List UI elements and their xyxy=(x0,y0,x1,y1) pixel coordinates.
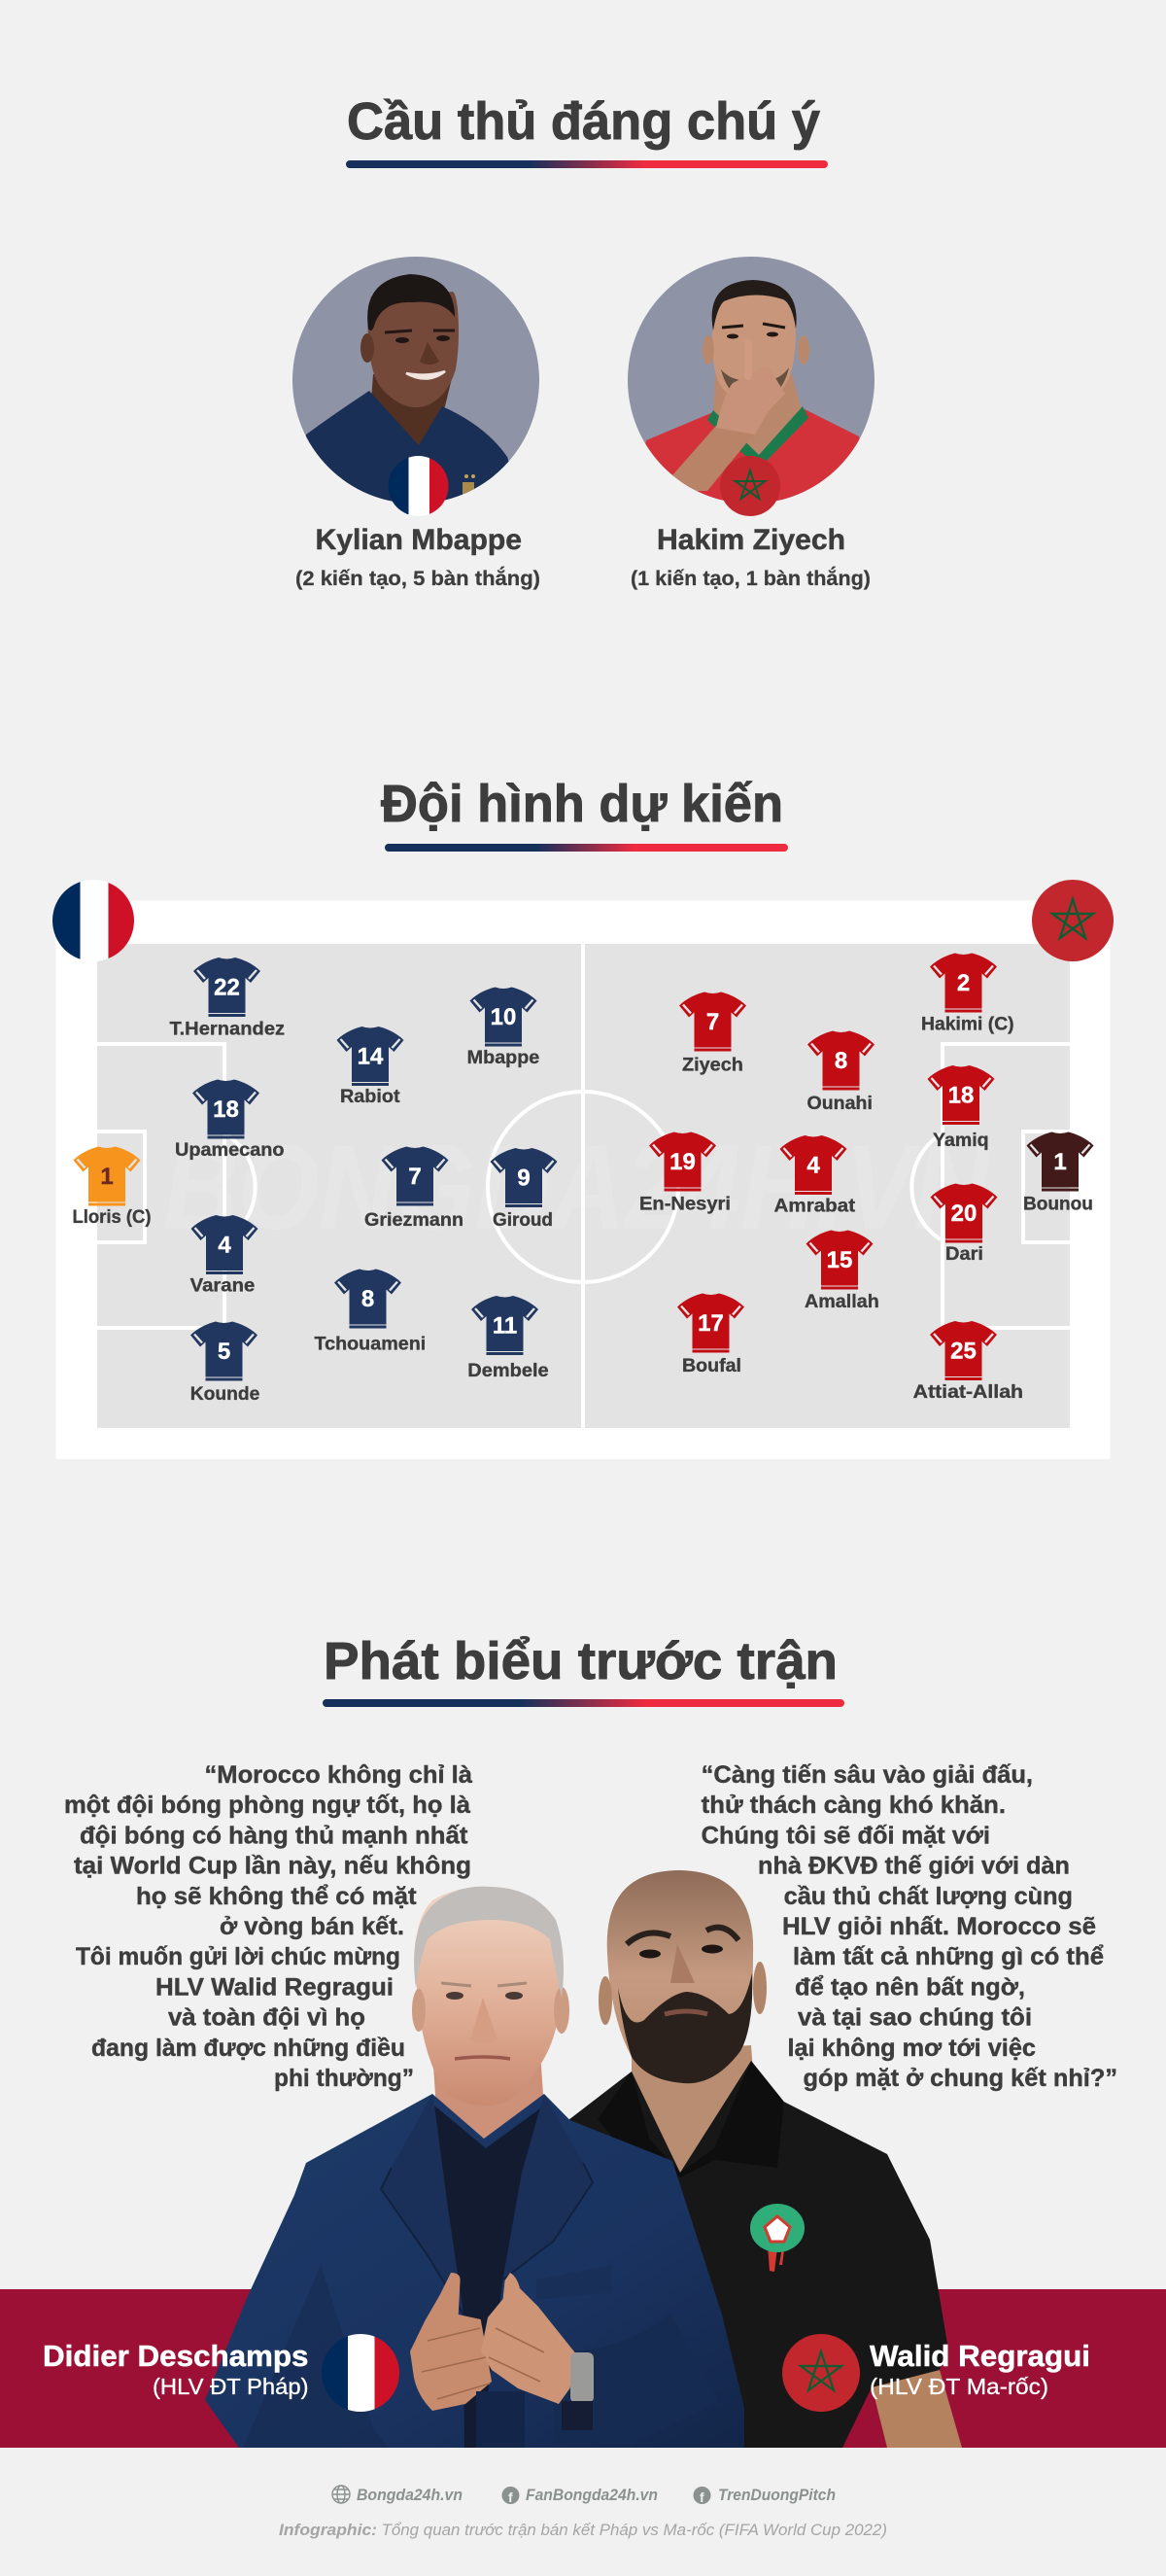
icon: globe xyxy=(332,2486,350,2503)
player: Boufal: 17 xyxy=(698,1310,724,1337)
panel: Hakim Ziyech xyxy=(627,257,875,590)
quote: Walid Regragui: góp mặt ở chung kết nhỉ?” xyxy=(803,2065,1117,2092)
stats: Ziyech: (1 kiến tạo, 1 bàn thắng) xyxy=(631,567,871,590)
player: Hakimi (C): 2 xyxy=(957,970,970,996)
quote: Walid Regragui: thử thách càng khó khăn. xyxy=(702,1792,1006,1819)
player: Tchouameni: Tchouameni xyxy=(315,1334,426,1355)
photo: Didier Deschamps xyxy=(205,1887,744,2448)
photo: Walid Regragui xyxy=(568,1870,962,2448)
player: Amrabat: Amrabat xyxy=(773,1196,856,1217)
player: Dembele: 11 xyxy=(493,1312,517,1340)
player: Upamecano: Upamecano xyxy=(175,1139,285,1161)
player: Ziyech xyxy=(679,992,746,1075)
player: Lloris (C): 1 xyxy=(100,1164,114,1190)
player: Amrabat: 4 xyxy=(806,1153,820,1178)
player: En-Nesyri: En-Nesyri xyxy=(639,1194,731,1215)
player: Ounahi xyxy=(806,1030,874,1114)
player: Bounou xyxy=(1023,1131,1094,1215)
footer: sources: FanBongda24h.vn xyxy=(526,2486,658,2504)
icon: France flag xyxy=(389,456,449,516)
quote: Walid Regragui: HLV giỏi nhất. Morocco sẽ xyxy=(782,1913,1096,1940)
player: Lloris (C): Lloris (C) xyxy=(72,1206,152,1228)
label: Walid Regragui: (HLV ĐT Ma-rốc) xyxy=(870,2374,1048,2399)
player: Griezmann: 7 xyxy=(408,1164,422,1190)
player: Dembele xyxy=(467,1296,549,1381)
quote: Didier Deschamps: đội bóng có hàng thủ mạnh nhất xyxy=(80,1822,468,1849)
player: Attiat-Allah xyxy=(913,1321,1023,1403)
label: Walid Regragui xyxy=(870,2339,1090,2399)
player: Lloris (C) xyxy=(72,1147,152,1228)
player: Boufal: Boufal xyxy=(682,1355,741,1376)
icon: facebook xyxy=(501,2487,519,2505)
photo: Mbappe portrait xyxy=(292,257,540,525)
icon: facebook: f xyxy=(700,2489,704,2505)
quote: Didier Deschamps: họ sẽ không thể có mặt xyxy=(136,1883,417,1910)
icon: Morocco flag xyxy=(782,2334,860,2412)
player: Upamecano xyxy=(175,1079,285,1161)
player: Mbappe: 10 xyxy=(491,1004,516,1030)
pitch surface xyxy=(97,944,1070,1428)
icon: facebook: f xyxy=(508,2489,513,2505)
watch xyxy=(570,2352,594,2403)
player: Tchouameni xyxy=(315,1270,426,1355)
player: T.Hernandez: 22 xyxy=(214,974,240,1001)
footer: sources: TrenDuongPitch xyxy=(718,2486,836,2504)
quote: Didier Deschamps: “Morocco không chỉ là xyxy=(204,1761,472,1789)
banner: coaches xyxy=(0,2289,1166,2448)
player: Amallah: Amallah xyxy=(805,1291,879,1312)
player: En-Nesyri xyxy=(639,1131,731,1215)
pitch frame xyxy=(56,900,1110,1459)
heading: Phát biểu trước trận: Phát biểu trước trận xyxy=(324,1632,838,1690)
player: Rabiot xyxy=(336,1027,404,1107)
quote: Walid Regragui xyxy=(702,1761,1117,2092)
icon: Morocco flag xyxy=(1032,880,1114,961)
player: Kounde: 5 xyxy=(218,1339,230,1365)
quote: Didier Deschamps: và toàn đội vì họ xyxy=(168,2004,365,2032)
heading: Cầu thủ đáng chú ý: Cầu thủ đáng chú ý xyxy=(347,92,820,151)
quote: Didier Deschamps: ở vòng bán kết. xyxy=(220,1913,404,1940)
panel: pitch with line-ups xyxy=(52,880,1114,1459)
player: Ounahi: 8 xyxy=(835,1048,847,1074)
player: Dari xyxy=(931,1184,997,1265)
player: Varane: Varane xyxy=(190,1275,255,1297)
player: Hakimi (C) xyxy=(921,953,1014,1034)
player: Amallah xyxy=(805,1231,879,1312)
player: Yamiq: 18 xyxy=(948,1083,974,1108)
player: Ziyech: 7 xyxy=(706,1009,719,1035)
quote: Walid Regragui: “Càng tiến sâu vào giải đấu, xyxy=(702,1761,1033,1789)
quote: Didier Deschamps: Tôi muốn gửi lời chúc mừng xyxy=(76,1943,400,1970)
name: Kylian Mbappe: Kylian Mbappe xyxy=(315,524,522,556)
player: Rabiot: Rabiot xyxy=(340,1086,400,1107)
hands xyxy=(410,2273,492,2411)
icon: Morocco badge xyxy=(750,2204,805,2272)
player: T.Hernandez: T.Hernandez xyxy=(169,1019,285,1040)
quote: Walid Regragui: cầu thủ chất lượng cùng xyxy=(784,1883,1073,1910)
player: Bounou: 1 xyxy=(1053,1149,1067,1175)
player: Kounde: Kounde xyxy=(190,1383,259,1405)
label: Didier Deschamps: Didier Deschamps xyxy=(43,2339,309,2373)
player: Amallah: 15 xyxy=(827,1247,852,1273)
player: Dari: 20 xyxy=(951,1201,977,1227)
footer: sources: Bongda24h.vn xyxy=(357,2486,463,2504)
footer: infographic credit: Tổng quan trước trận bán kết Pháp vs Ma-rốc (FIFA World Cup 2022) xyxy=(381,2521,887,2539)
quote: Walid Regragui: lại không mơ tới việc xyxy=(787,2035,1036,2062)
icon: France flag xyxy=(52,880,134,961)
heading: Đội hình dự kiến: Đội hình dự kiến xyxy=(381,775,783,833)
player: Rabiot: 14 xyxy=(358,1044,384,1069)
icon: facebook xyxy=(694,2487,711,2505)
watermark: BONGDA24H.VN xyxy=(163,1122,991,1255)
icon: France flag xyxy=(322,2334,399,2412)
label: Didier Deschamps xyxy=(43,2339,309,2399)
player: Boufal xyxy=(677,1293,744,1376)
player: Attiat-Allah: 25 xyxy=(950,1338,977,1365)
icon: Morocco flag xyxy=(720,456,780,516)
quote: Walid Regragui: để tạo nên bất ngờ, xyxy=(795,1973,1025,2001)
player: Kounde xyxy=(190,1322,259,1405)
player: Upamecano: 18 xyxy=(213,1097,239,1123)
player: Dari: Dari xyxy=(945,1243,983,1265)
player: T.Hernandez xyxy=(169,957,285,1040)
quote: Didier Deschamps: một đội bóng phòng ngự tốt, họ là xyxy=(64,1792,470,1819)
quote: Didier Deschamps: HLV Walid Regragui xyxy=(155,1973,394,2001)
footer: sources xyxy=(332,2486,836,2505)
player: Yamiq xyxy=(927,1065,995,1151)
player: Griezmann: Griezmann xyxy=(364,1209,463,1231)
player: Yamiq: Yamiq xyxy=(933,1130,989,1151)
quote: Walid Regragui: làm tất cả những gì có thể xyxy=(793,1943,1104,1970)
pitch markings xyxy=(97,944,1070,1428)
quote: Didier Deschamps: phi thường” xyxy=(274,2065,414,2092)
player: Ziyech: Ziyech xyxy=(682,1054,743,1075)
label: Didier Deschamps: (HLV ĐT Pháp) xyxy=(153,2374,309,2399)
quote: Walid Regragui: nhà ĐKVĐ thế giới với dàn xyxy=(758,1853,1070,1880)
label: Walid Regragui: Walid Regragui xyxy=(870,2339,1090,2373)
player: Dembele: Dembele xyxy=(467,1360,549,1381)
player: Attiat-Allah: Attiat-Allah xyxy=(913,1381,1023,1403)
quote: Didier Deschamps: đang làm được những điều xyxy=(91,2035,405,2062)
player: Mbappe xyxy=(467,988,539,1068)
panel: Kylian Mbappe xyxy=(292,257,540,590)
player: Giroud: 9 xyxy=(517,1165,531,1192)
stats: Mbappe: (2 kiến tạo, 5 bàn thắng) xyxy=(295,567,540,590)
footer: infographic credit: Infographic: xyxy=(279,2521,377,2539)
quote: Walid Regragui: Chúng tôi sẽ đối mặt với xyxy=(702,1822,990,1849)
photo: Ziyech portrait xyxy=(627,257,875,525)
player: Giroud: Giroud xyxy=(493,1209,553,1231)
quote: Didier Deschamps: tại World Cup lần này, nếu không xyxy=(74,1853,471,1880)
player: Griezmann xyxy=(364,1147,463,1231)
quote: Walid Regragui: và tại sao chúng tôi xyxy=(798,2004,1032,2032)
name: Hakim Ziyech: Hakim Ziyech xyxy=(657,524,845,556)
player: En-Nesyri: 19 xyxy=(669,1149,696,1175)
player: Hakimi (C): Hakimi (C) xyxy=(921,1013,1014,1034)
player: Giroud xyxy=(490,1148,558,1231)
player: Bounou: Bounou xyxy=(1023,1194,1093,1215)
player: Varane: 4 xyxy=(218,1233,231,1258)
player: Amrabat xyxy=(773,1135,856,1217)
quote: Didier Deschamps xyxy=(64,1761,472,2092)
player: Tchouameni: 8 xyxy=(361,1286,374,1312)
player: Varane xyxy=(190,1215,258,1297)
player: Ounahi: Ounahi xyxy=(806,1093,873,1114)
player: Mbappe: Mbappe xyxy=(467,1047,539,1068)
